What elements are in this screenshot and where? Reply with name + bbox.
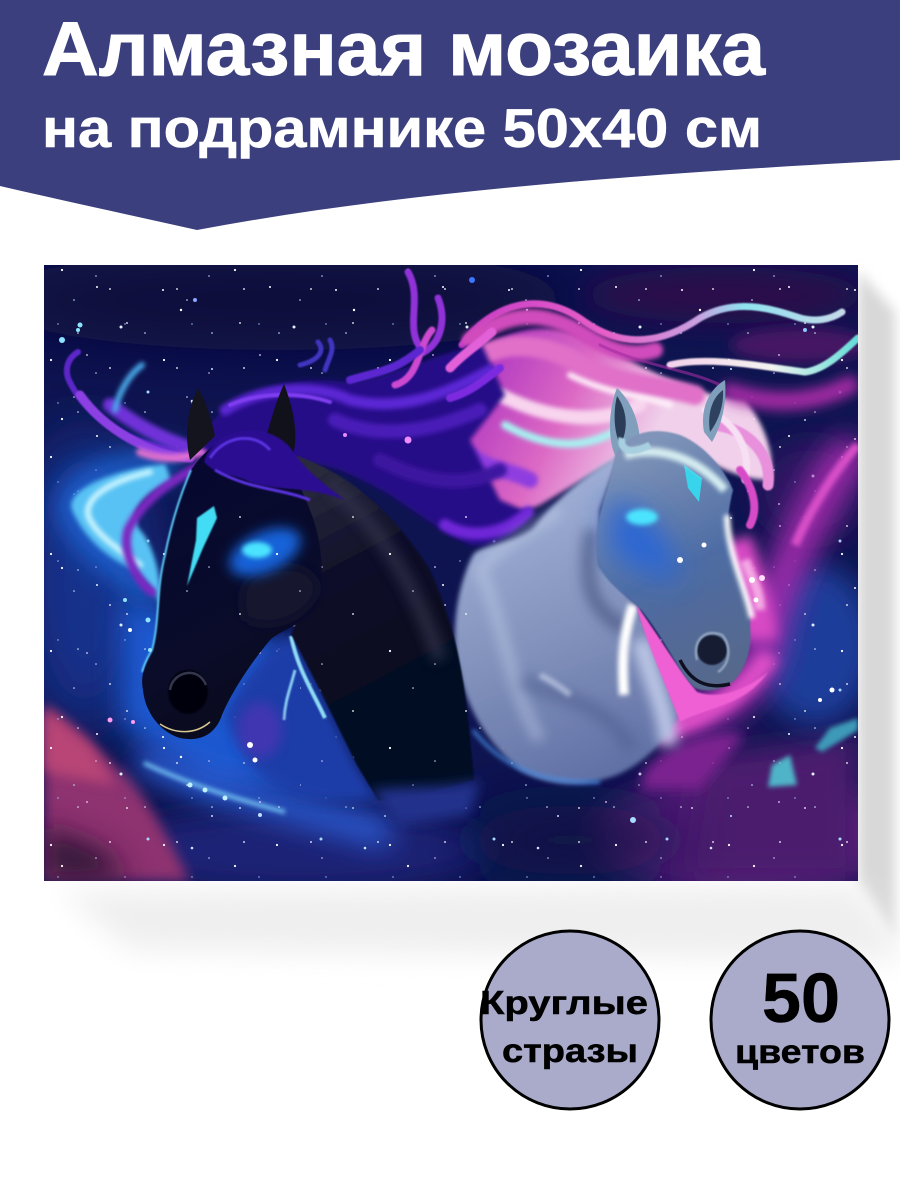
badge: round rhinestones: стразы [502,1032,638,1069]
glowing eye [242,542,272,558]
blue cloud at neck base [370,780,480,825]
header banner [0,0,900,230]
glowing eye [626,509,658,525]
badge: 50 colors: 50 [762,959,840,1037]
badge: round rhinestones [480,931,659,1109]
muzzle and nostril [168,670,208,714]
canvas drop shadow [60,270,900,960]
badge: 50 colors [711,931,889,1109]
blue eye glow [222,518,308,586]
left ear [187,388,215,460]
subtitle: на подрамнике 50х40 см [42,97,762,159]
space background [44,265,858,881]
forehead mark [684,465,702,502]
black horse neck [291,455,480,825]
right ear [267,384,296,454]
pink glow under white horse head [636,605,768,722]
white horse pink mane [452,304,858,525]
cyan and purple left wisps [67,340,332,605]
painting: two cosmic horses [44,265,858,881]
second star layer [44,265,858,881]
cyan forehead mark [187,506,217,586]
mouth [680,660,730,686]
blue eye patch [610,500,680,580]
black horse head [142,384,345,739]
pattern of stars [44,265,858,881]
badge: round rhinestones: Круглые [480,984,648,1021]
third star layer [44,265,858,881]
face stars [186,516,301,615]
white horse body [455,455,680,784]
face edge glow [142,470,191,672]
blue chest of black horse [225,634,380,802]
title: Алмазная мозаика [42,7,766,92]
face highlight [727,515,752,618]
right ear [703,380,725,442]
mouth line [160,722,210,732]
badge: 50 colors: цветов [735,1033,865,1070]
cheek [246,571,312,626]
black horse purple mane [195,272,528,545]
left ear [610,388,640,455]
forelock [625,452,725,490]
nostril [697,635,727,665]
purple forelock [204,430,345,500]
magenta nebula swirl [640,445,858,790]
bright stars and sparkle clusters [59,277,834,823]
white horse head [596,380,752,690]
